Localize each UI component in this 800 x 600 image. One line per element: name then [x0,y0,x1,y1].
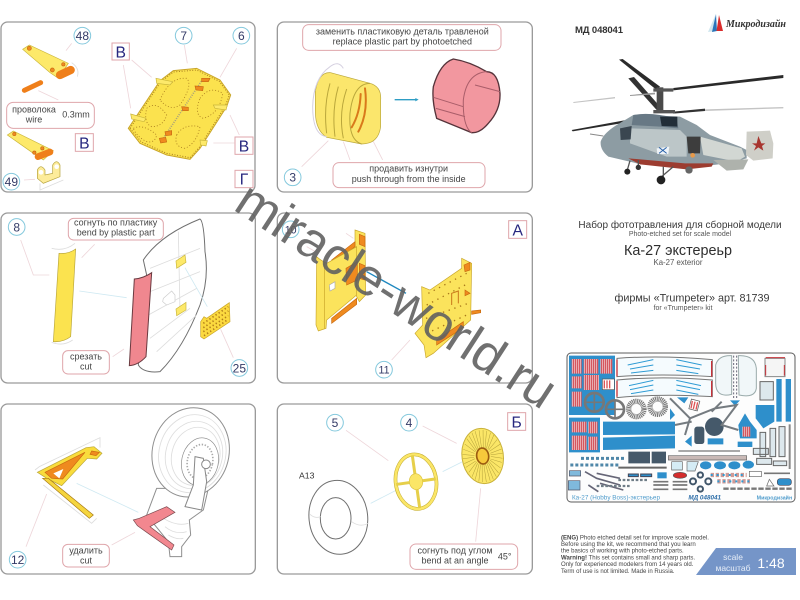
heading: set title: фирмы «Trumpeter» арт. 81739 [614,292,770,304]
callout: cut: удалить [69,545,103,555]
label: В: В [79,135,90,152]
label: А: А [512,222,523,239]
icon: frame part 10 [316,230,366,331]
icon: yellow cowl part 3 [313,64,381,144]
number: 48 [74,27,91,44]
callout: wire: проволока [12,104,56,114]
panel: landing gear [1,399,255,574]
label: В [75,134,93,152]
label: Б: Б [512,414,522,431]
panel: intake replacement [277,22,532,192]
callout: bend by plastic part: согнуть по пластику [74,218,158,228]
number: 3 [284,169,301,186]
callout: bend at an angle: согнуть под углом [417,545,493,555]
icon: pink plastic part [433,59,500,133]
number: 48: 48 [76,29,89,43]
number: 10 [282,221,299,238]
image: photo-etched fret: Ка-27 (Hobby Boss)-экстерьер [572,495,660,502]
callout: bend by plastic part: bend by plastic part [77,228,155,238]
icon: yellow strip part 8 [52,243,76,344]
callout: push through [333,163,485,188]
heading: set title: Ка-27 экстереьр [624,243,732,259]
callout: push through: продавить изнутри [369,164,448,174]
label: Г [235,170,253,189]
text block: warning: Only for experienced modelers from 14 years old. [561,562,694,568]
badge: scale 1:48: 1:48 [757,555,785,571]
icon: perforated bracket part 25 [201,303,230,339]
brand logo: Микродизайн [725,19,786,30]
heading: set title: Ka-27 exterior [654,258,703,267]
callout: cut [63,351,109,374]
arrow: to pink part [395,98,419,101]
number: 11: 11 [378,365,390,377]
icon: yellow door tabs [176,255,186,316]
badge: scale 1:48: scale [723,552,743,562]
label: В: В [239,138,249,155]
icon: spoked ring part 5 [392,452,440,512]
panel: fan grille B [277,404,532,574]
image: photo-etched fret: Микродизайн [757,495,792,502]
icon: perforated yellow door [128,68,231,159]
heading: set title [578,219,782,312]
number: 4 [401,414,417,431]
number: 8 [8,219,25,235]
heading: set title: Набор фототравления для сборной модели [578,219,782,231]
callout: replace plastic part [303,25,501,50]
label: Б [508,413,526,431]
icon: pink strip to cut [129,273,152,366]
icon: yellow strut part 12 [35,438,102,523]
icon: pink strut to cut [133,507,175,550]
number: 7 [175,27,192,44]
text block: warning: Before using the kit, we recommend that you learn [561,542,696,548]
number: 25: 25 [233,361,246,375]
number: 12 [9,551,26,568]
watermark: miracle-world.ru: miracle-world.ru [225,170,567,420]
text: A13: А13 [299,470,315,480]
text block: warning [561,536,709,575]
icon: oval A13 [305,477,371,557]
callout: cut: срезать [70,352,102,362]
icon: frame part 11 [415,258,481,358]
number: 12: 12 [11,553,25,567]
callout: cut: cut [80,362,92,372]
icon: door outline [138,219,206,372]
heading: set title: Photo-etched set for scale model [629,231,732,238]
number: 8: 8 [13,220,20,234]
label: В [235,137,253,155]
label: В: В [115,44,126,61]
text block: warning: Term of use is not limited. Made in Russia. [561,569,675,575]
number: 25 [231,360,248,376]
text block: warning: the basics of working with photo-etched parts. [561,548,684,554]
number: 4: 4 [406,416,413,430]
number: 6 [233,27,250,44]
callout: bend at an angle [410,544,518,569]
callout: push through: push through from the inside [352,174,466,184]
number: 5 [327,414,343,431]
number: 11 [376,361,392,378]
label: А [509,221,527,239]
callout: bend by plastic part [68,218,163,240]
callout: wire: 0.3mm [62,110,90,120]
number: 49: 49 [5,175,18,189]
icon: hinge part 48 [23,45,78,90]
callout: replace plastic part: replace plastic part by photoetched [333,37,472,47]
callout: bend at an angle: 45° [498,552,512,562]
badge: scale 1:48: масштаб [715,563,751,573]
panel: wire hinge and doors [1,22,255,192]
number: 6: 6 [238,29,245,43]
brand logo [708,14,786,32]
number: 3: 3 [289,171,296,185]
icon: wheel outline [143,399,239,557]
panel: door strip and tabs [1,213,255,383]
icon: fan grille part 4 [458,426,507,486]
image: photo-etched fret [567,353,795,502]
number: 49 [3,173,20,190]
image: photo-etched fret: МД 048041 [688,495,722,502]
callout: cut [63,544,109,567]
number: 7: 7 [180,29,187,43]
label: В [112,43,129,61]
arrow: frame to frame [367,272,406,293]
text block: warning: Warning! This set contains small and sharp parts. [561,556,695,562]
text block: warning: (ENG) Photo etched detail set for improve scale model. [561,536,709,542]
panel: frame parts A [277,213,532,383]
image: Ka-27 helicopter [572,59,783,184]
callout: cut: cut [80,555,92,565]
number: 5: 5 [332,416,339,430]
icon: hinge part 49 [7,131,63,190]
heading: set title: for «Trumpeter» kit [654,305,712,312]
article number: МД 048041 [575,25,624,36]
callout: wire [7,102,94,128]
badge: scale 1:48 [696,548,796,575]
callout: bend at an angle: bend at an angle [422,555,488,565]
label: Г: Г [240,172,249,189]
callout: replace plastic part: заменить пластиковую деталь травленой [316,27,489,37]
number: 10: 10 [285,225,297,237]
callout: wire: wire [25,114,42,124]
